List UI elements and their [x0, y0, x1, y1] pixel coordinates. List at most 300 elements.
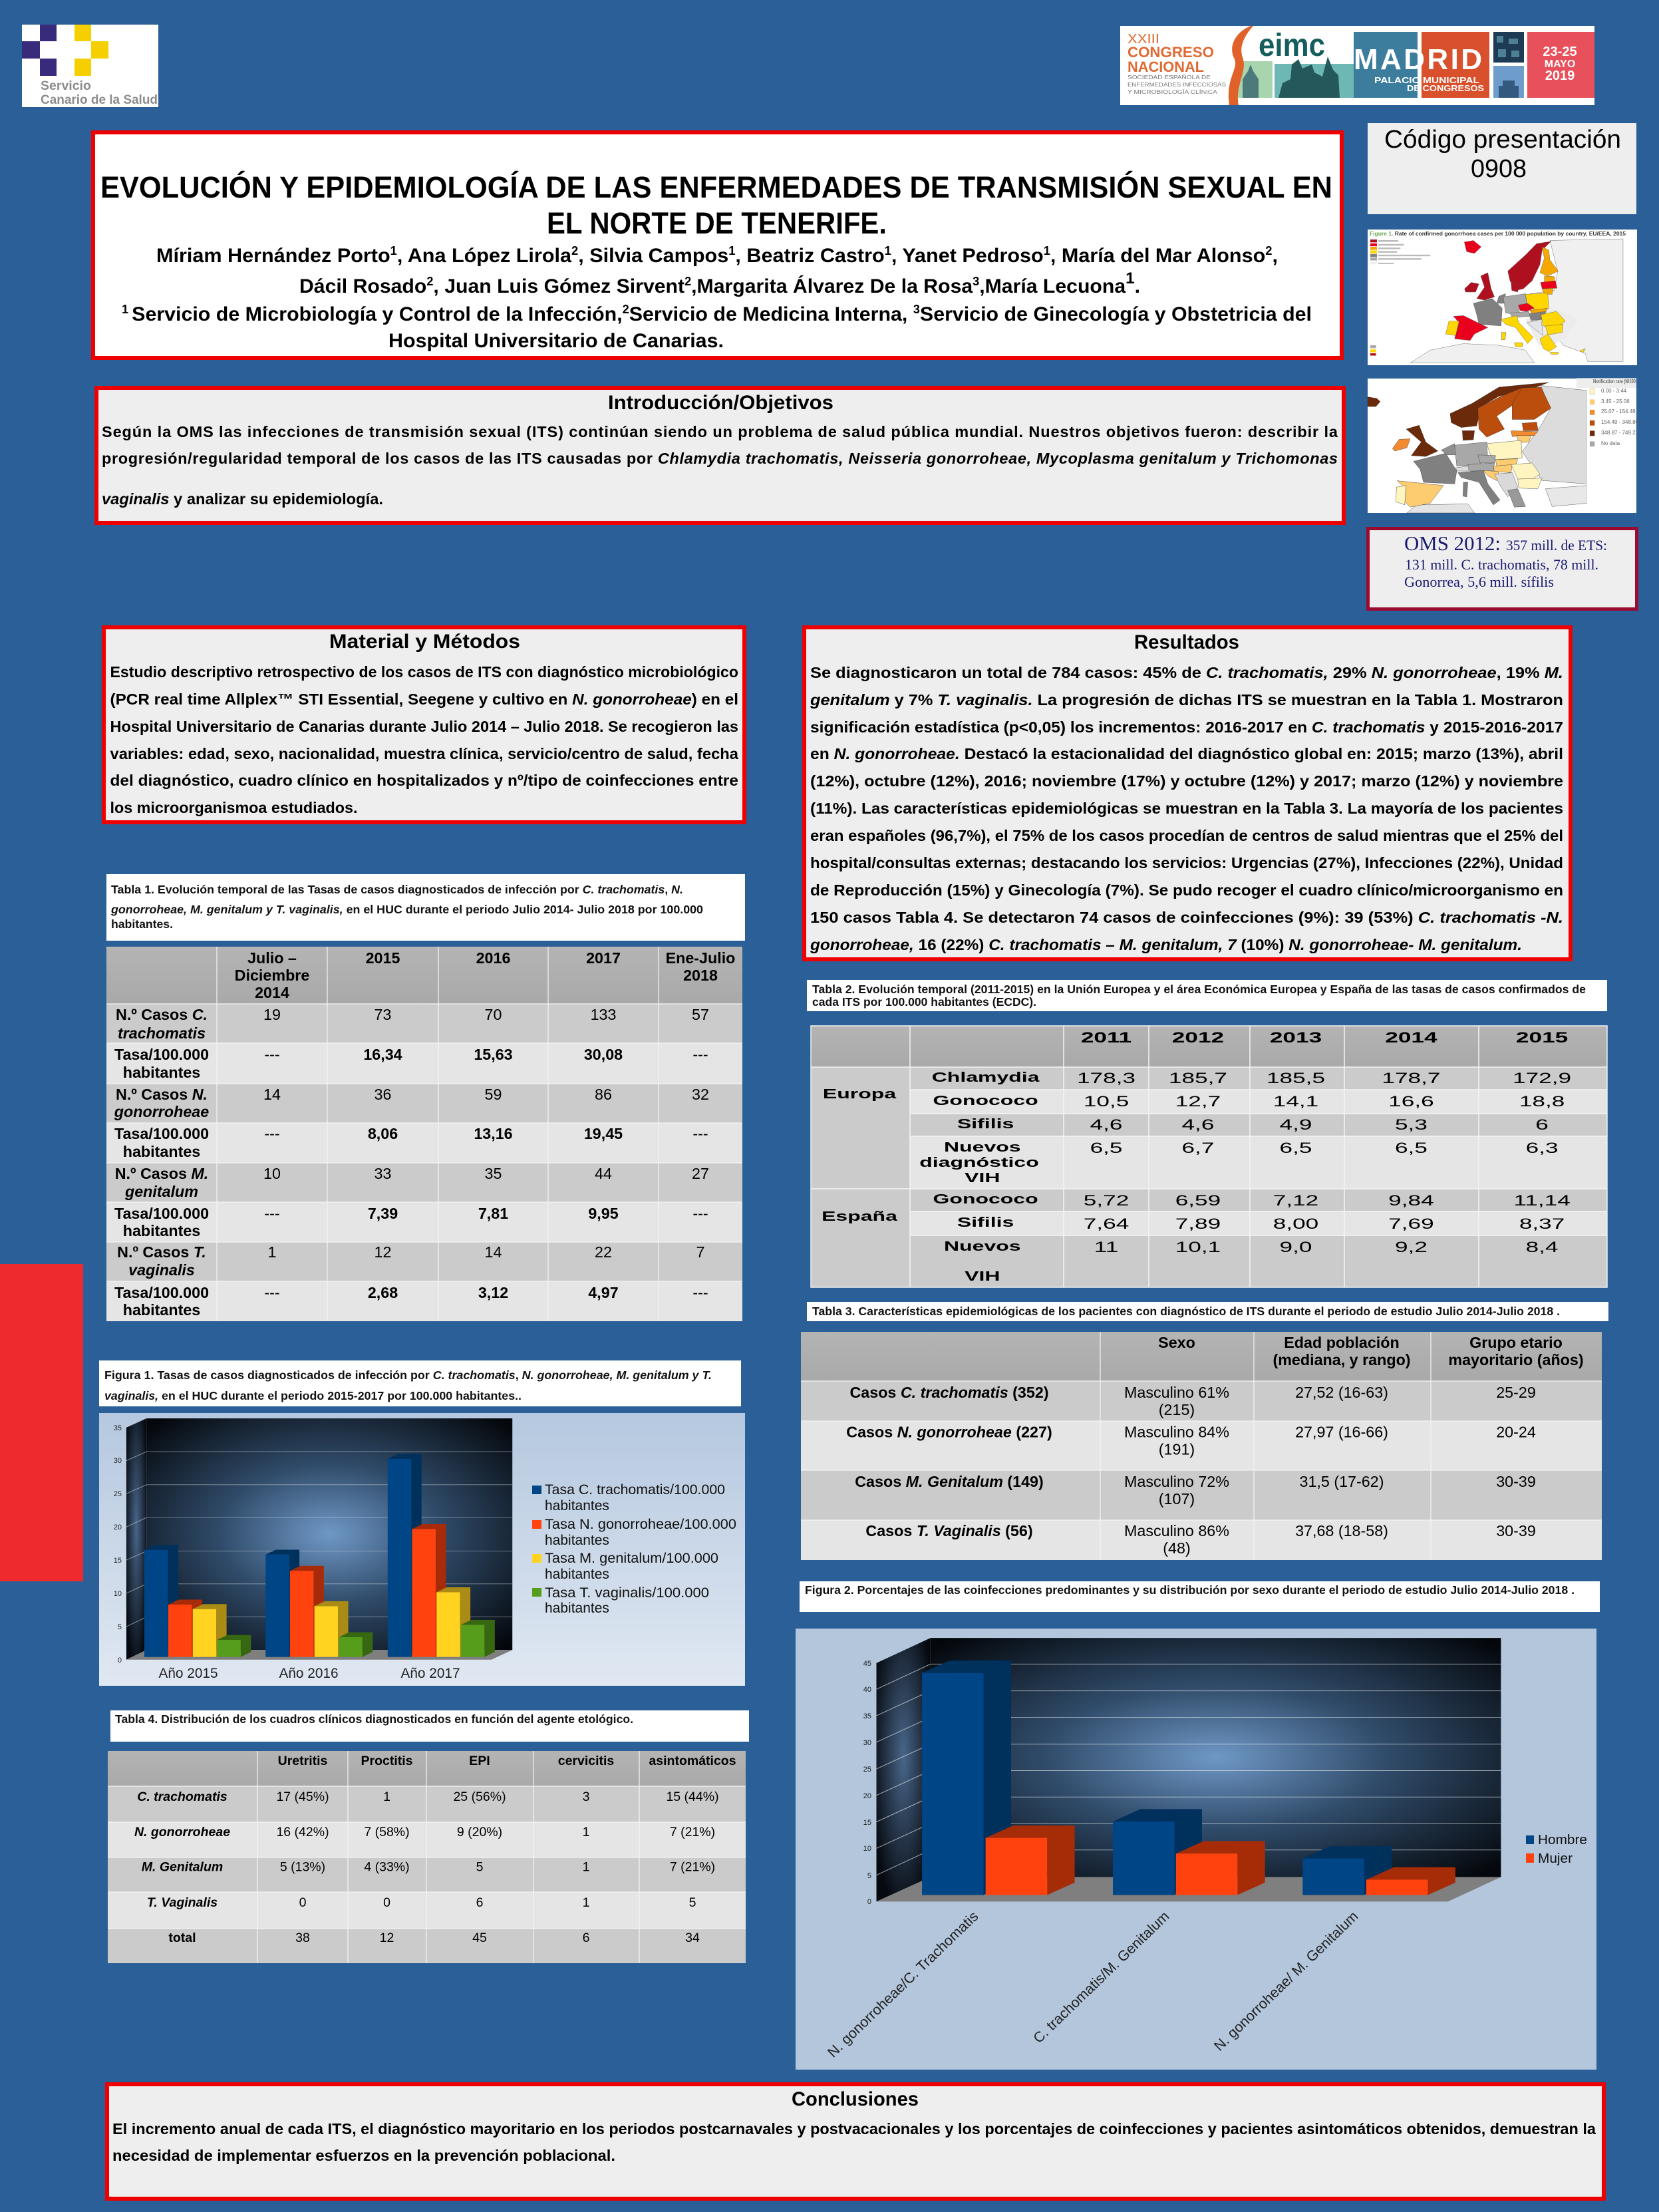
table 1 row labels: Tasa/100.000	[114, 1046, 209, 1063]
table 3	[801, 1332, 1602, 1560]
results text: genitalum y 7% T. vaginalis. La progresión de dichas ITS se muestran en la Tabla 1. Mostraron	[810, 691, 1563, 709]
table 3 values: 31,5 (17-62)	[1300, 1473, 1384, 1490]
table 2 row labels: Sifilis	[957, 1116, 1014, 1131]
authors	[156, 244, 1278, 297]
table 1 values: ---	[692, 1205, 708, 1222]
table 4 values: 1	[383, 1790, 390, 1804]
table 1 values: 13,16	[474, 1125, 513, 1142]
table 2 values: 7,12	[1273, 1193, 1318, 1209]
table 3 values	[1124, 1384, 1536, 1557]
table 3 values: (191)	[1159, 1441, 1195, 1458]
x axis labels: Año 2016	[279, 1666, 339, 1681]
heading: Conclusiones: Conclusiones	[792, 2088, 919, 2110]
table 1 row labels: N.º Casos T.	[117, 1243, 206, 1261]
table 1 values: 16,34	[363, 1046, 402, 1063]
table 1 row labels: Tasa/100.000	[114, 1125, 209, 1142]
table 4 header	[278, 1754, 736, 1768]
y axis labels: 10	[114, 1590, 122, 1598]
table 1 values: 73	[375, 1006, 391, 1023]
table 4 values: 12	[380, 1931, 394, 1945]
table 1 values: 7,81	[478, 1205, 508, 1222]
table 2 row labels: Nuevos	[944, 1239, 1021, 1253]
table 4 values: 1	[583, 1825, 589, 1839]
table 1 header: 2015	[366, 949, 400, 967]
affiliations: 1 Servicio de Microbiología y Control de la Infección, 2Servicio de Medicina Interna, 3Servicio de Ginecología y Obstetricia del	[122, 303, 1312, 325]
table 2 header: 2015	[1516, 1030, 1568, 1046]
panel: title and authors	[93, 132, 1342, 358]
table 2 header: 2013	[1270, 1030, 1322, 1046]
table 4 values: 6	[583, 1931, 589, 1945]
table 1 header: Diciembre	[235, 967, 309, 984]
table 2 row labels: Gonococo	[933, 1093, 1038, 1108]
table 4 row labels	[134, 1790, 230, 1945]
table 2 values: 5,3	[1395, 1117, 1428, 1133]
caption: Tabla 3: Tabla 3. Características epidemiológicas de los pacientes con diagnóstico de ITS durante el periodo de estudio Julio 2014-Julio 2018 .	[812, 1305, 1560, 1318]
table 3 header: Edad población	[1284, 1334, 1400, 1351]
table 2 values: 10,5	[1084, 1094, 1129, 1110]
map: notification rate Europe: 25.07 - 154.48	[1601, 408, 1636, 414]
table 4 values: 5 (13%)	[280, 1860, 325, 1875]
table 2 row labels: España	[822, 1209, 897, 1223]
map: gonorrhoea rate Europe 2015: Figure 1. Rate of confirmed gonorrhoea cases per 100 000 population by country, EU/EEA, 2015	[1370, 231, 1626, 237]
table 2 row labels: diagnóstico	[919, 1155, 1039, 1170]
panel: Conclusiones	[107, 2084, 1604, 2199]
table 1 values: 86	[595, 1086, 612, 1103]
table 3 values: (107)	[1159, 1490, 1195, 1507]
table 1 header: Ene-Julio	[666, 949, 735, 967]
table 2 values: 16,6	[1388, 1094, 1434, 1110]
table 2 values: 7,89	[1175, 1216, 1221, 1232]
caption: Tabla 1	[106, 874, 745, 941]
table 4	[108, 1751, 746, 1963]
callout: OMS 2012	[1368, 528, 1636, 609]
table 1 row labels: habitantes	[123, 1064, 200, 1081]
table 3 row labels: Casos C. trachomatis (352)	[849, 1384, 1049, 1401]
table 1 values: 2,68	[368, 1284, 398, 1301]
intro text	[102, 423, 1338, 508]
table 1 values: 7,39	[368, 1205, 398, 1222]
logo: Servicio Canario de la Salud: Servicio	[41, 79, 91, 93]
conclusions text	[112, 2120, 1596, 2164]
callout: OMS 2012: Gonorrea, 5,6 mill. sífilis	[1404, 573, 1554, 590]
table 2 values: 178,3	[1077, 1070, 1135, 1086]
affiliations: Hospital Universitario de Canarias.	[388, 330, 724, 352]
y axis labels: 0	[118, 1657, 122, 1664]
methods text: Hospital Universitario de Canarias durante Julio 2014 – Julio 2018. Se recogieron las	[110, 718, 738, 735]
caption: Tabla 4: Tabla 4. Distribución de los cuadros clínicos diagnosticados en función del agente etológico.	[115, 1712, 633, 1726]
map: gonorrhoea rate Europe 2015	[1368, 230, 1637, 365]
table 2 values: 6,5	[1395, 1140, 1428, 1156]
caption: Tabla 2: cada ITS por 100.000 habitantes (ECDC).	[812, 995, 1036, 1009]
y axis labels	[863, 1660, 871, 1906]
table 1 row labels: vaginalis	[128, 1261, 195, 1279]
heading: Resultados: Resultados	[1134, 631, 1239, 653]
table 2 header: 2012	[1172, 1030, 1224, 1046]
caption: Figura 2	[800, 1581, 1600, 1612]
table 1 row labels: Tasa/100.000	[114, 1205, 209, 1222]
table 1 header: 2016	[476, 949, 510, 967]
y axis labels: 5	[867, 1872, 871, 1880]
map: notification rate Europe: 0.00 - 3.44	[1601, 388, 1627, 394]
table 1 values: 133	[591, 1006, 616, 1023]
intro text: progresión/regularidad temporal de los casos de las ITS causadas por Chlamydia trachomatis, Neisseria gonorroheae, Mycoplasma genitalum y Trichomonas	[102, 450, 1338, 467]
table 4 row labels: C. trachomatis	[137, 1790, 227, 1804]
table 3 values: 37,68 (18-58)	[1295, 1522, 1388, 1539]
table 1 values: 19	[263, 1006, 281, 1023]
table 3 header: Sexo	[1158, 1334, 1195, 1351]
table 4 header: Uretritis	[278, 1754, 328, 1768]
table 2 values: 10,1	[1175, 1239, 1221, 1255]
table 1 values: 36	[375, 1086, 391, 1103]
title: EL NORTE DE TENERIFE.	[547, 206, 887, 240]
table 2 values: 6,5	[1090, 1140, 1123, 1156]
x axis labels: Año 2017	[400, 1666, 460, 1681]
table 2 values: 7,69	[1388, 1216, 1434, 1232]
table 3 row labels: Casos N. gonorroheae (227)	[846, 1424, 1052, 1441]
title	[100, 170, 1332, 240]
map: notification rate Europe: 3.45 - 25.06	[1601, 398, 1630, 404]
heading: Introducción/Objetivos: Introducción/Objetivos	[608, 392, 833, 414]
table 4 header: Proctitis	[361, 1754, 413, 1768]
legend: habitantes	[545, 1601, 609, 1616]
legend: Tasa T. vaginalis/100.000	[545, 1585, 709, 1601]
y axis labels	[114, 1424, 122, 1664]
table 1 values: ---	[264, 1205, 280, 1222]
logo: Servicio Canario de la Salud: Canario de la Salud	[41, 92, 158, 107]
table 1 values: ---	[692, 1046, 708, 1063]
caption: Tabla 2: Tabla 2. Evolución temporal (2011-2015) en la Unión Europea y el área Económica Europea y España de las tasas de casos confirmados de	[812, 983, 1586, 996]
table 2	[811, 1026, 1607, 1287]
table 1 values: ---	[692, 1284, 708, 1301]
methods text	[110, 663, 739, 816]
intro text: vaginalis y analizar su epidemiología.	[102, 490, 383, 508]
map: notification rate Europe	[1368, 378, 1639, 513]
conclusions text: necesidad de implementar esfuerzos en la prevención poblacional.	[112, 2147, 615, 2164]
panel: Introducción/Objetivos	[96, 388, 1344, 523]
chart: figura 1	[99, 1413, 745, 1686]
table 2 values: 6,59	[1175, 1193, 1221, 1209]
table 4 row labels: N. gonorroheae	[134, 1825, 230, 1839]
table 1 values: ---	[264, 1046, 280, 1063]
table 2 row labels: Nuevos	[944, 1140, 1021, 1154]
table 1 values: ---	[264, 1125, 280, 1142]
table 3 values: Masculino 84%	[1124, 1424, 1229, 1441]
y axis labels: 25	[114, 1490, 122, 1498]
map: notification rate Europe: 348.87 - 749.22	[1601, 430, 1639, 436]
table 1 values: 59	[485, 1086, 502, 1103]
table 2 values: 8,4	[1526, 1239, 1559, 1255]
table 1 values: 33	[375, 1165, 391, 1182]
table 2 values: 185,7	[1169, 1070, 1227, 1086]
table 2 values: 8,00	[1273, 1216, 1318, 1232]
table 4 values: 7 (58%)	[364, 1825, 410, 1839]
table 2 row labels: Chlamydia	[932, 1070, 1040, 1084]
red side block	[0, 1264, 83, 1581]
y axis labels: 35	[114, 1424, 122, 1432]
table 4 values: 5	[689, 1895, 696, 1910]
table 2 values	[1077, 1070, 1571, 1255]
table 1	[106, 947, 742, 1321]
caption: Tabla 4	[110, 1710, 749, 1742]
table 2 values: 11	[1094, 1239, 1118, 1255]
table 2 values: 7,64	[1084, 1216, 1129, 1232]
table 2 values: 4,6	[1181, 1117, 1214, 1133]
panel: Material y Métodos	[104, 627, 744, 822]
table 2 values: 178,7	[1382, 1070, 1440, 1086]
table 2 values: 185,5	[1267, 1070, 1325, 1086]
results text: en N. gonorroheae. Destacó la estacionalidad del diagnóstico global en: 2015; marzo (13%), abril	[810, 745, 1563, 762]
x axis labels	[158, 1666, 460, 1681]
results text	[810, 664, 1563, 953]
x axis labels	[824, 1908, 1361, 2060]
table 1 values: 9,95	[588, 1205, 619, 1222]
caption: Tabla 2	[807, 980, 1607, 1011]
callout: OMS 2012: 131 mill. C. trachomatis, 78 mill.	[1405, 556, 1598, 573]
intro text: Según la OMS las infecciones de transmisión sexual (ITS) continúan siendo un problema de salud pública mundial. Nuestros objetivos fueron: describir la	[102, 423, 1338, 440]
legend: Hombre	[1538, 1833, 1587, 1847]
table 2 row labels: VIH	[965, 1269, 1000, 1283]
congress banner: ENFERMEDADES INFECCIOSAS	[1128, 81, 1226, 88]
table 4 header: cervicitis	[558, 1754, 614, 1768]
table 1 values: 12	[375, 1243, 391, 1261]
y axis labels: 30	[863, 1739, 871, 1747]
table 4 values: 1	[583, 1860, 589, 1875]
methods text: del diagnóstico, cuadro clínico en hospitalizados y nº/tipo de coinfecciones entre	[110, 772, 738, 789]
x axis labels: N. gonorroheae/C. Trachomatis	[824, 1908, 981, 2060]
table 1 values	[263, 1006, 709, 1301]
table 3 values: 25-29	[1496, 1384, 1536, 1401]
table 1 row labels: N.º Casos N.	[116, 1086, 208, 1103]
table 3 header	[1158, 1334, 1584, 1368]
methods text: (PCR real time Allplex™ STI Essential, Seegene y cultivo en N. gonorroheae ) en el	[110, 691, 738, 708]
table 1 values: ---	[264, 1284, 280, 1301]
callout: OMS 2012: 357 mill. de ETS:	[1506, 537, 1607, 553]
table 3 row labels: Casos T. Vaginalis (56)	[865, 1522, 1033, 1539]
caption: Tabla 1: gonorroheae, M. genitalum y T. vaginalis, en el HUC durante el periodo Julio 2014- Julio 2018 por 100.000	[110, 903, 703, 916]
table 1 header: Julio –	[247, 949, 297, 967]
authors: Dácil Rosado2, Juan Luis Gómez Sirvent2,Margarita Álvarez De la Rosa3,María Lecuona1.	[299, 269, 1140, 297]
table 4 values: 9 (20%)	[457, 1825, 502, 1839]
table 1 values: 10	[263, 1165, 281, 1182]
chart: figura 2	[796, 1629, 1596, 2070]
table 1 values: ---	[692, 1125, 708, 1142]
legend	[532, 1482, 736, 1616]
table 1 values: 22	[595, 1243, 612, 1261]
table 3 header: (mediana, y rango)	[1273, 1351, 1411, 1368]
methods text: los microorganismoa estudiados.	[110, 799, 358, 816]
y axis labels: 0	[867, 1898, 871, 1906]
table 2 values: 5,72	[1084, 1193, 1129, 1209]
legend: Tasa N. gonorroheae/100.000	[545, 1517, 736, 1532]
caption: Tabla 1: Tabla 1. Evolución temporal de las Tasas de casos diagnosticados de infección por C. trachomatis, N.	[111, 883, 683, 896]
table 1 header: 2018	[683, 967, 718, 984]
table 3 header: mayoritario (años)	[1448, 1351, 1584, 1368]
table 4 values: 1	[583, 1895, 589, 1910]
y axis labels: 10	[863, 1845, 871, 1853]
congress banner: XXIII	[1128, 32, 1159, 47]
logo: Servicio Canario de la Salud	[22, 25, 158, 107]
table 4 values: 4 (33%)	[364, 1860, 410, 1875]
table 2 values: 172,9	[1513, 1070, 1571, 1086]
table 1 values: 15,63	[474, 1046, 513, 1063]
table 1 values: 57	[692, 1006, 709, 1023]
legend: habitantes	[545, 1567, 609, 1582]
results text: Se diagnosticaron un total de 784 casos: 45% de C. trachomatis, 29% N. gonorroheae , 19% M.	[810, 664, 1563, 681]
map: notification rate Europe: Notification rate (N/100	[1593, 379, 1636, 385]
table 1 values: 70	[485, 1006, 502, 1023]
table 1 row labels: Tasa/100.000	[114, 1284, 209, 1301]
y axis labels: 15	[114, 1557, 122, 1565]
table 1 values: 4,97	[588, 1284, 619, 1301]
table 3 header: Grupo etario	[1469, 1334, 1563, 1351]
table 2 values: 9,0	[1280, 1239, 1312, 1255]
congress banner: 23-25	[1543, 45, 1577, 59]
table 3 values: (215)	[1159, 1401, 1195, 1418]
table 1 header	[235, 949, 735, 1001]
table 3 row labels	[846, 1384, 1052, 1539]
table 4 values: 0	[383, 1895, 390, 1910]
table 3 values: Masculino 61%	[1124, 1384, 1229, 1401]
y axis labels: 35	[863, 1712, 871, 1720]
x axis labels: Año 2015	[158, 1666, 218, 1681]
map: notification rate Europe: 154.49 - 348.86	[1601, 419, 1639, 425]
table 3 row labels: Casos M. Genitalum (149)	[855, 1473, 1044, 1490]
caption: Figura 1	[99, 1360, 741, 1406]
caption: Tabla 3	[807, 1302, 1608, 1321]
y axis labels: 30	[114, 1457, 122, 1465]
table 3 values: 27,52 (16-63)	[1295, 1384, 1388, 1401]
results text: eran españoles (96,7%), el 75% de los casos procedían de centros de salud mientras que el 25% del	[810, 827, 1563, 844]
table 2 values: 8,37	[1519, 1216, 1565, 1232]
title: EVOLUCIÓN Y EPIDEMIOLOGÍA DE LAS ENFERMEDADES DE TRANSMISIÓN SEXUAL EN	[100, 170, 1332, 204]
table 2 values: 11,14	[1513, 1193, 1571, 1209]
table 1 row labels: habitantes	[123, 1222, 200, 1239]
table 1 values: 44	[595, 1165, 612, 1182]
methods text: Estudio descriptivo retrospectivo de los casos de ITS con diagnóstico microbiológico	[110, 663, 738, 681]
table 4 header: EPI	[469, 1754, 490, 1768]
table 1 row labels: genitalum	[124, 1183, 198, 1200]
y axis labels: 20	[863, 1792, 871, 1800]
y axis labels: 25	[863, 1766, 871, 1774]
table 4 values: 0	[299, 1895, 307, 1910]
table 4 row labels: total	[168, 1931, 196, 1945]
table 1 values: 3,12	[478, 1284, 508, 1301]
legend: Tasa C. trachomatis/100.000	[545, 1482, 725, 1498]
table 4 values: 7 (21%)	[670, 1860, 715, 1875]
table 4 values: 15 (44%)	[666, 1790, 719, 1804]
table 4 values	[276, 1790, 719, 1945]
callout: OMS 2012: OMS 2012:	[1404, 532, 1501, 555]
congress banner: MADRID	[1354, 43, 1482, 76]
results text: significación estadística (p<0,05) los incrementos: 2016-2017 en C. trachomatis y 2015-2016-2017	[810, 718, 1563, 736]
table 1 values: 32	[692, 1086, 709, 1103]
y axis labels: 20	[114, 1523, 122, 1531]
table 4 values: 5	[476, 1860, 484, 1875]
legend: Tasa M. genitalum/100.000	[545, 1551, 718, 1566]
table 1 values: 8,06	[368, 1125, 398, 1142]
results text: (11%). Las características epidemiológicas se muestran en la Tabla 3. La mayoría de los pacientes	[810, 800, 1563, 817]
affiliations	[122, 303, 1312, 352]
table 1 row labels: N.º Casos M.	[115, 1165, 208, 1182]
table 2 values: 9,84	[1388, 1193, 1434, 1209]
results text: (12%), octubre (12%), 2016; noviembre (17%) y octubre (12%) y 2017; marzo (12%) y noviembre	[810, 772, 1563, 790]
table 3 values: Masculino 86%	[1124, 1522, 1229, 1539]
congress banner: MAYO	[1545, 59, 1575, 70]
congress banner: eimc	[1259, 28, 1325, 63]
congress banner: CONGRESO	[1128, 44, 1214, 61]
table 2 values: 18,8	[1519, 1094, 1565, 1110]
legend: Mujer	[1538, 1851, 1573, 1866]
table 4 values: 34	[685, 1931, 700, 1945]
results text: de Reproducción (15%) y Ginecología (7%). Se pudo recoger el cuadro clínico/microorganismo en	[810, 881, 1563, 899]
caption: Figura 2: Figura 2. Porcentajes de las coinfecciones predominantes y su distribución por sexo durante el periodo de estudio Julio 2014-Julio 2018 .	[805, 1583, 1575, 1597]
table 4 values: 6	[476, 1895, 483, 1910]
x axis labels: N. gonorroheae/ M. Genitalum	[1211, 1908, 1361, 2054]
table 3 values: (48)	[1163, 1539, 1191, 1557]
table 4 values: 45	[472, 1931, 487, 1945]
table 4 row labels: T. Vaginalis	[147, 1895, 218, 1910]
conclusions text: El incremento anual de cada ITS, el diagnóstico mayoritario en los periodos postcarnavales y postvacacionales y los porcentajes de coinfecciones y pacientes asintomáticos obtenidos, demuestran la	[112, 2120, 1596, 2137]
congress banner: Y MICROBIOLOGÍA CLÍNICA	[1128, 88, 1217, 95]
table 2 values: 12,7	[1175, 1094, 1221, 1110]
table 1 row labels: gonorroheae	[114, 1103, 209, 1120]
panel: código presentación: 0908	[1471, 155, 1527, 183]
results text: hospital/consultas externas; destacando los servicios: Urgencias (27%), Infecciones (22%), Unidad	[810, 854, 1563, 871]
table 2 values: 6,3	[1526, 1140, 1559, 1156]
table 3 values: 27,97 (16-66)	[1295, 1424, 1388, 1441]
table 1 values: 1	[268, 1243, 276, 1261]
table 1 header: 2017	[586, 949, 621, 967]
x axis labels: C. trachomatis/M. Genitalum	[1030, 1908, 1172, 2046]
table 2 row labels	[822, 1070, 1040, 1283]
caption: Figura 1: vaginalis, en el HUC durante el periodo 2015-2017 por 100.000 habitantes..	[104, 1389, 522, 1402]
table 1 values: 7	[696, 1243, 704, 1261]
table 2 values: 14,1	[1273, 1094, 1318, 1110]
legend: habitantes	[545, 1533, 609, 1548]
table 3 values: Masculino 72%	[1124, 1473, 1229, 1490]
table 2 header	[1081, 1030, 1568, 1046]
legend: habitantes	[545, 1498, 609, 1513]
table 3 values: 20-24	[1496, 1424, 1536, 1441]
panel: Resultados	[804, 627, 1571, 959]
table 2 row labels: Sifilis	[957, 1215, 1014, 1229]
table 1 row labels: trachomatis	[118, 1025, 206, 1042]
results text: 150 casos Tabla 4. Se detectaron 74 casos de coinfecciones (9%): 39 (53%) C. trachomatis -N.	[810, 909, 1563, 926]
panel: código presentación	[1368, 123, 1636, 214]
legend	[1526, 1833, 1587, 1866]
table 4 values: 17 (45%)	[276, 1790, 329, 1804]
caption: Figura 1: Figura 1. Tasas de casos diagnosticados de infección por C. trachomatis, N. gonorroheae, M. genitalum y T.	[104, 1368, 712, 1382]
table 2 values: 4,9	[1280, 1117, 1312, 1133]
table 1 values: 30,08	[584, 1046, 623, 1063]
congress banner	[1120, 26, 1594, 105]
table 2 header: 2014	[1385, 1030, 1437, 1046]
table 1 values: 27	[692, 1165, 709, 1182]
table 2 row labels: Gonococo	[933, 1191, 1038, 1206]
map: notification rate Europe: No data	[1601, 440, 1620, 446]
congress banner: DE CONGRESOS	[1407, 83, 1484, 93]
table 1 values: 14	[485, 1243, 502, 1261]
table 4 header: asintomáticos	[649, 1754, 736, 1768]
methods text: variables: edad, sexo, nacionalidad, muestra clínica, servicio/centro de salud, fecha	[110, 745, 739, 762]
table 4 values: 3	[583, 1790, 589, 1804]
congress banner: SOCIEDAD ESPAÑOLA DE	[1128, 74, 1211, 80]
caption: Tabla 1: habitantes.	[111, 917, 173, 931]
table 2 values: 4,6	[1090, 1117, 1123, 1133]
table 1 values: 19,45	[584, 1125, 623, 1142]
table 1 values: 35	[485, 1165, 502, 1182]
y axis labels: 5	[118, 1623, 122, 1631]
